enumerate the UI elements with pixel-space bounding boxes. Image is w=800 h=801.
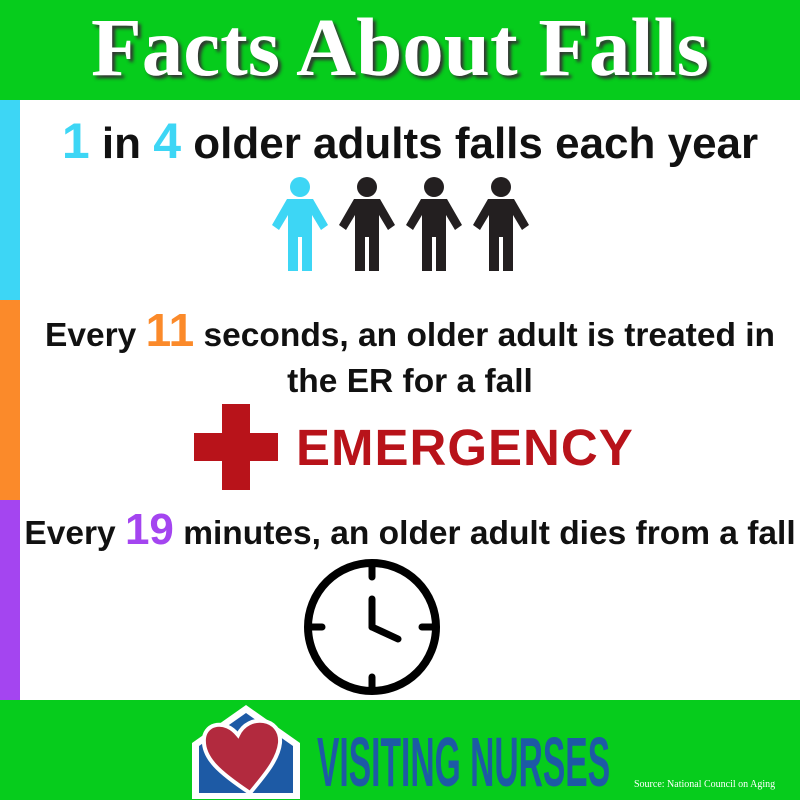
source note: Source: National Council on Aging (634, 779, 775, 790)
logo text: VISITING NURSES (317, 723, 610, 801)
footer banner (0, 700, 800, 800)
logo: house heart (192, 705, 300, 799)
fact 1 text: 1 in 4 older adults falls each year (62, 113, 758, 169)
fact 3 text: Every 19 minutes, an older adult dies from a fall (24, 505, 796, 554)
fact 2 text: Every 11 seconds, an older adult is treated in (45, 304, 775, 356)
icon: clock (304, 559, 440, 695)
color bar: purple (0, 500, 20, 700)
emergency label: EMERGENCY (296, 419, 634, 476)
color bar: cyan (0, 100, 20, 300)
header banner (0, 0, 800, 100)
color bar: orange (0, 300, 20, 500)
fact 2 text (45, 304, 775, 400)
title: Facts About Falls (91, 1, 709, 93)
fact 2 text: the ER for a fall (287, 363, 533, 400)
icon: red cross emergency (194, 404, 634, 490)
icon: four people (272, 177, 529, 271)
